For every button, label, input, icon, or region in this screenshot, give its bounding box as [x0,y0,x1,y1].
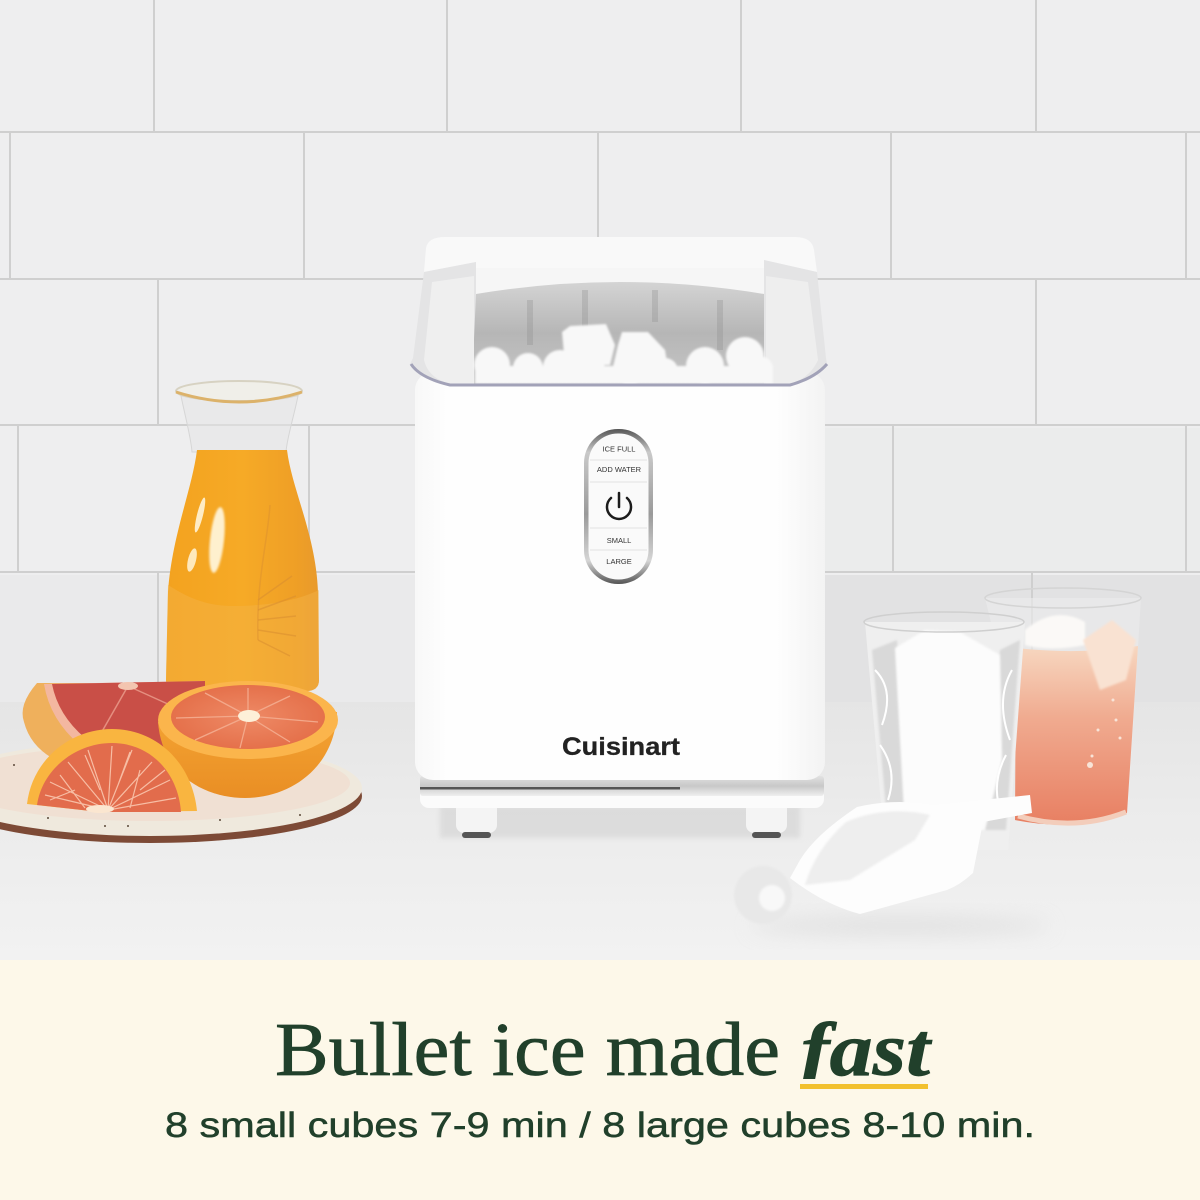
ice maker [410,237,827,838]
ice cubes [474,324,773,386]
heading [276,1021,933,1079]
tiled wall background [0,0,1200,705]
panel labels: SMALL [607,536,631,545]
orange half [158,681,338,798]
grapefruit wedge back [23,681,205,770]
heading: Bullet ice made [275,1008,780,1092]
juice carafe [166,381,319,691]
panel labels: ICE FULL [603,444,635,454]
main housing [415,372,825,780]
lid top [424,237,817,272]
panel labels: LARGE [606,557,632,566]
brand logo: Cuisinart [562,733,681,761]
heading: fast [801,1008,933,1092]
hopper rim [411,364,827,385]
panel labels: ADD WATER [597,465,642,474]
pink drink glass [985,588,1141,825]
machine feet [456,800,787,838]
subheading: 8 small cubes 7-9 min / 8 large cubes 8-10 min. [165,1106,1035,1145]
plate [0,740,362,843]
countertop [0,702,1200,960]
ice glass [864,612,1025,850]
control panel [584,429,653,584]
icon: power [607,493,631,519]
yellow underline [800,1084,928,1089]
ice cube [734,866,792,924]
clear hopper [410,260,827,386]
banner [166,1021,1032,1145]
ice scoop [734,795,1032,924]
base plate [420,776,824,808]
panel labels [597,444,642,566]
grapefruit wedge front [27,729,197,813]
